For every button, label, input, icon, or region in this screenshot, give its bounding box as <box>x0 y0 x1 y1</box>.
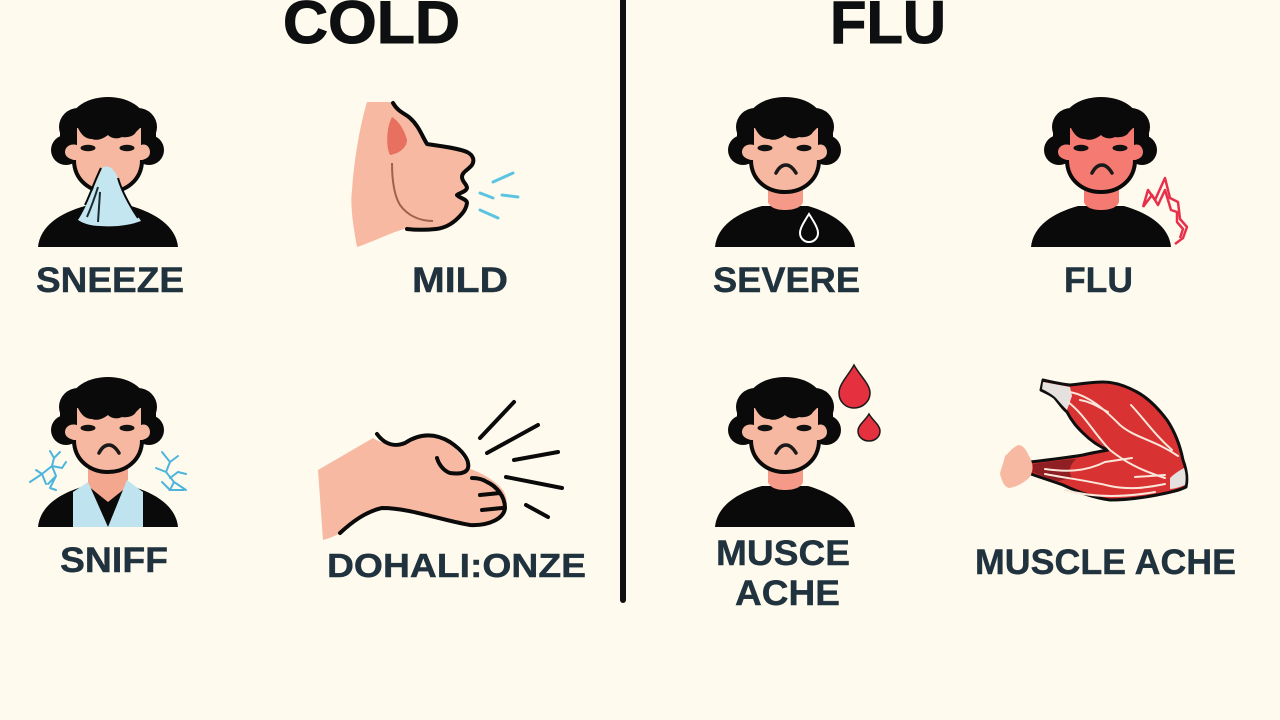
icon: large blood drop <box>839 365 870 408</box>
label: severe: SEVERE <box>713 261 860 300</box>
center divider <box>620 0 626 603</box>
icon: muscle <box>1000 380 1187 500</box>
icon: person with tissue <box>38 97 178 247</box>
panel: sneeze <box>36 97 184 300</box>
panel: dohalionze <box>318 402 586 584</box>
label: ache: ACHE <box>735 574 840 613</box>
icon: hand with motion lines <box>318 402 562 540</box>
label: musce: MUSCE <box>716 534 850 573</box>
panel: muscle ache <box>975 380 1236 582</box>
icon: red flame <box>1143 178 1187 244</box>
icon: small blood drop <box>858 414 880 441</box>
panel: sniff <box>30 377 186 580</box>
icon: white sweat drop <box>800 214 818 242</box>
label: sniff: SNIFF <box>60 541 168 580</box>
panel: mild <box>351 102 518 300</box>
icon: person <box>715 377 855 527</box>
panel: flu <box>1031 97 1187 300</box>
icon: right ice crystals <box>156 452 186 490</box>
panel: musce ache <box>715 365 880 613</box>
icon: person with scarf <box>38 377 178 527</box>
panel: severe <box>713 97 860 300</box>
icon: person with sweat drop <box>715 97 855 247</box>
icon: flushed person <box>1031 97 1171 247</box>
icon: face profile breathing out <box>351 102 518 247</box>
label: flu: FLU <box>1064 261 1133 300</box>
icon: left ice crystals <box>30 451 66 490</box>
label: dohali onze: DOHALI:ONZE <box>327 547 586 584</box>
label: muscle ache: MUSCLE ACHE <box>975 543 1236 582</box>
label: mild: MILD <box>412 261 508 300</box>
label: sneeze: SNEEZE <box>36 261 184 300</box>
